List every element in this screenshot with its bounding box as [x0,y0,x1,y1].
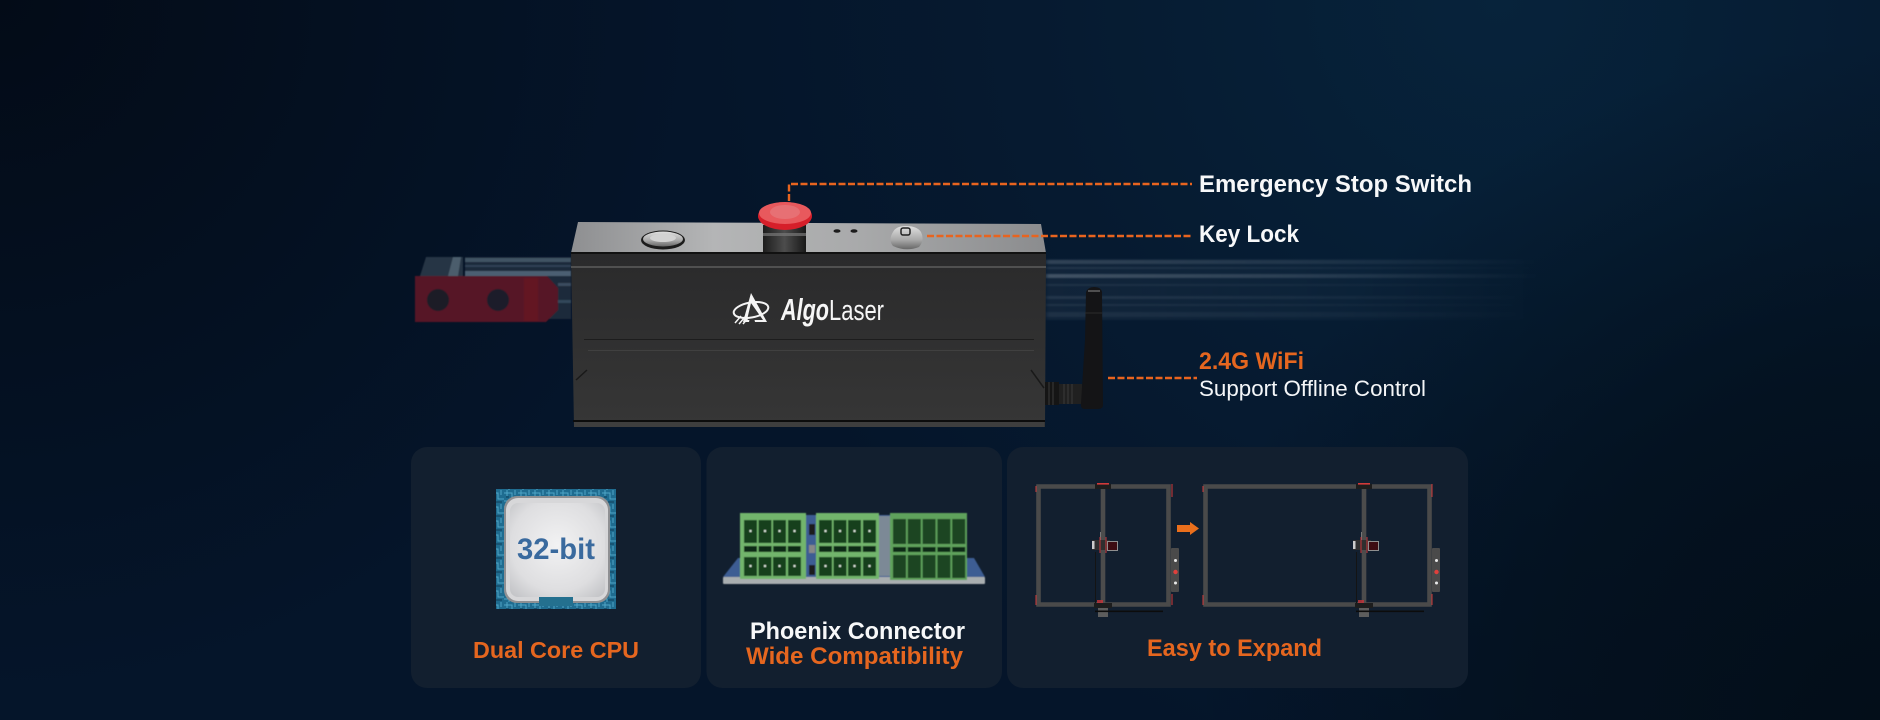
panel: dual core CPU [411,447,701,688]
panel: easy to expand [1007,447,1468,688]
connector block 3 [890,513,967,580]
red bracket [415,276,558,322]
diagram: small frame [1036,483,1179,617]
caption line 2: Wide Compatibility [746,643,964,670]
rail: left section with red bracket [415,257,571,322]
logo mark [732,293,770,324]
key lock [890,226,923,249]
callout line: wifi [1108,377,1197,379]
chip label: 32-bit [517,533,595,566]
antenna [1045,287,1103,409]
panel caption: Easy to Expand [1147,635,1322,662]
antenna connector [1045,382,1082,405]
label: Key Lock: Key Lock [1199,221,1300,248]
connector block 2 [816,513,879,579]
logo text: Algo [780,292,829,327]
panel: phoenix connector [706,447,1002,688]
emergency stop button [758,202,812,252]
indicator holes [834,229,858,233]
label: Emergency Stop Switch: Emergency Stop Switch [1199,171,1472,198]
controller box [571,202,1046,427]
rail: right motion-blurred section [1046,259,1540,320]
panel caption: Dual Core CPU [473,637,639,663]
antenna whip [1081,287,1103,409]
arrow [1177,522,1199,535]
icon: 32-bit chip [496,489,616,609]
label: 2.4G WiFi: 2.4G WiFi [1199,348,1304,375]
caption line 1: Phoenix Connector [750,618,965,645]
connector block 1 [740,513,806,579]
logo text: Laser [829,295,884,327]
front body [571,252,1046,427]
callout line: emergency stop [789,184,1192,201]
diagram: expanded frame [1203,483,1440,617]
icon: connector board [723,513,985,584]
label: Support Offline Control: Support Offline Control [1199,376,1426,401]
silver push button [641,230,685,250]
callout line: key lock [927,235,1192,237]
top silver panel [571,222,1046,253]
logo [732,292,884,327]
